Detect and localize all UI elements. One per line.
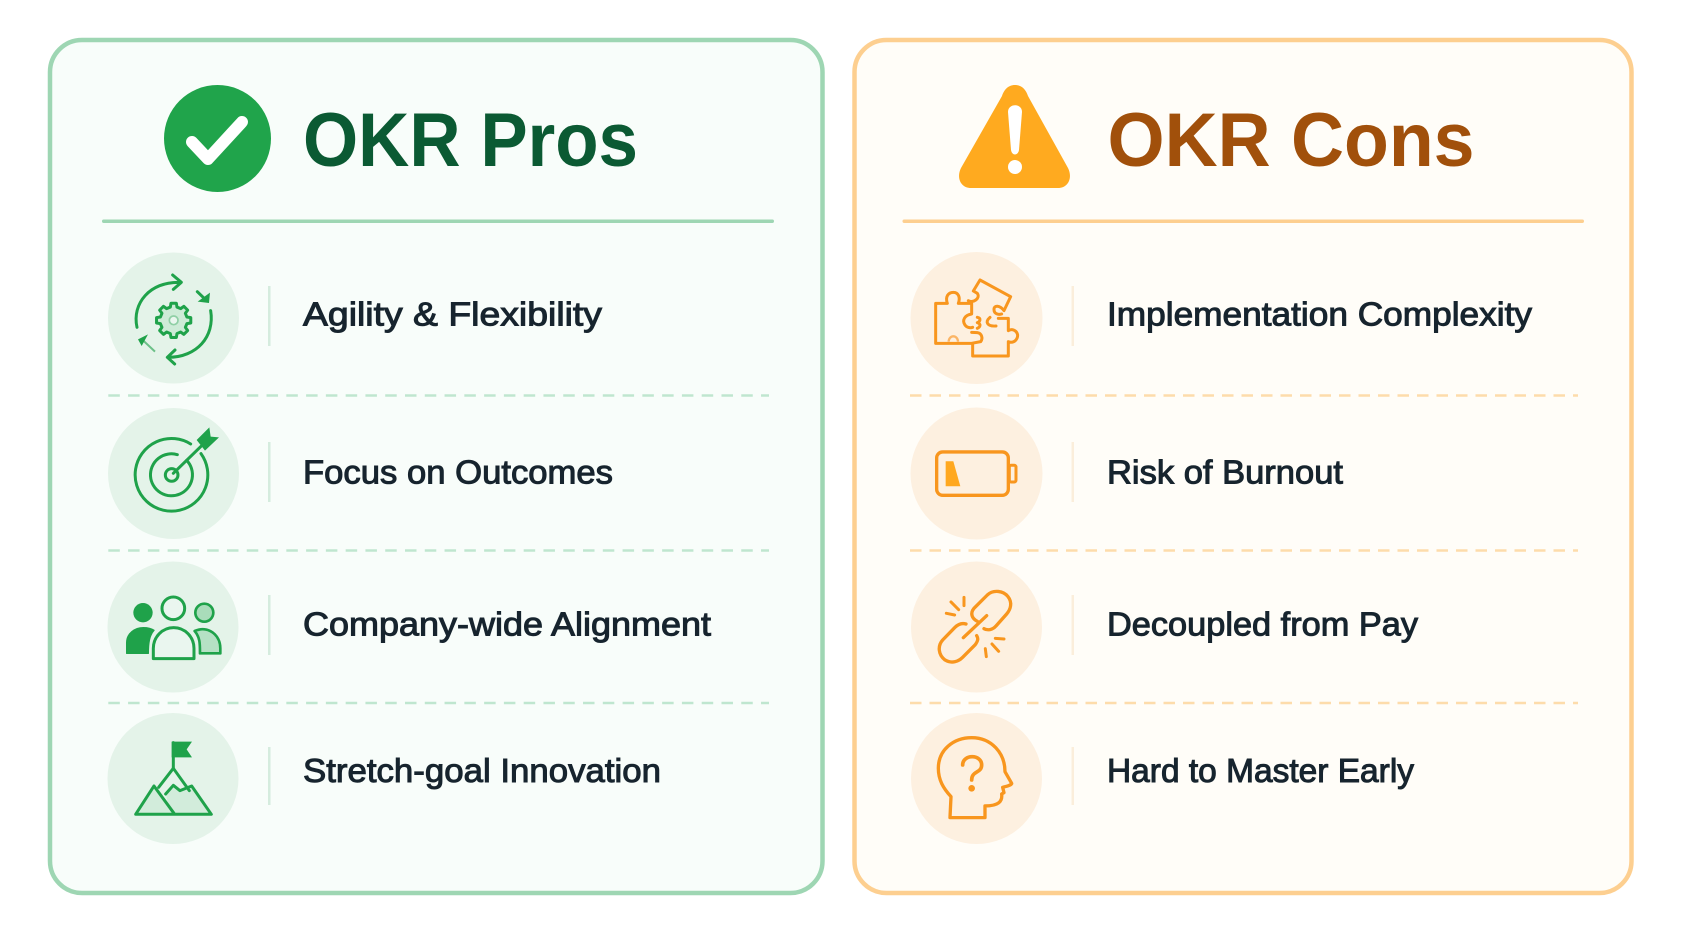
list item: Agility & Flexibility bbox=[108, 252, 603, 384]
heading: OKR Cons: OKR Cons bbox=[1108, 98, 1474, 183]
icon: warning triangle bbox=[959, 85, 1070, 188]
panel background: pros bbox=[50, 40, 822, 893]
label: Implementation Complexity: Implementation Complexity bbox=[1107, 296, 1533, 332]
list item: Focus on Outcomes bbox=[108, 408, 613, 539]
list item: Hard to Master Early bbox=[911, 713, 1415, 844]
label: Agility & Flexibility: Agility & Flexibility bbox=[303, 296, 603, 332]
list item: Company-wide Alignment bbox=[108, 562, 711, 692]
panel: OKR Pros bbox=[50, 40, 822, 893]
icon: mountain with flag bbox=[108, 713, 238, 844]
label: Hard to Master Early: Hard to Master Early bbox=[1107, 752, 1415, 789]
list item: Decoupled from Pay bbox=[911, 562, 1419, 692]
icon: puzzle pieces bbox=[910, 252, 1042, 384]
list item: Stretch-goal Innovation bbox=[108, 713, 661, 844]
panel background: cons bbox=[854, 40, 1632, 893]
icon: green check circle bbox=[164, 85, 271, 192]
icon: target with arrow bbox=[108, 408, 239, 539]
list item: Implementation Complexity bbox=[910, 252, 1533, 384]
label: Risk of Burnout: Risk of Burnout bbox=[1107, 454, 1343, 490]
label: Decoupled from Pay: Decoupled from Pay bbox=[1107, 606, 1419, 642]
icon: broken chain link bbox=[911, 562, 1042, 692]
icon: head with question mark bbox=[911, 713, 1042, 844]
icon: low battery bbox=[910, 408, 1042, 540]
icon: cycle arrows with gear bbox=[108, 252, 239, 384]
label: Company-wide Alignment: Company-wide Alignment bbox=[303, 606, 711, 642]
heading: OKR Pros: OKR Pros bbox=[303, 98, 638, 183]
icon: team of people bbox=[108, 562, 238, 692]
label: Focus on Outcomes: Focus on Outcomes bbox=[303, 454, 613, 490]
label: Stretch-goal Innovation: Stretch-goal Innovation bbox=[303, 752, 661, 789]
panel: OKR Cons bbox=[854, 40, 1632, 893]
list item: Risk of Burnout bbox=[910, 408, 1343, 540]
